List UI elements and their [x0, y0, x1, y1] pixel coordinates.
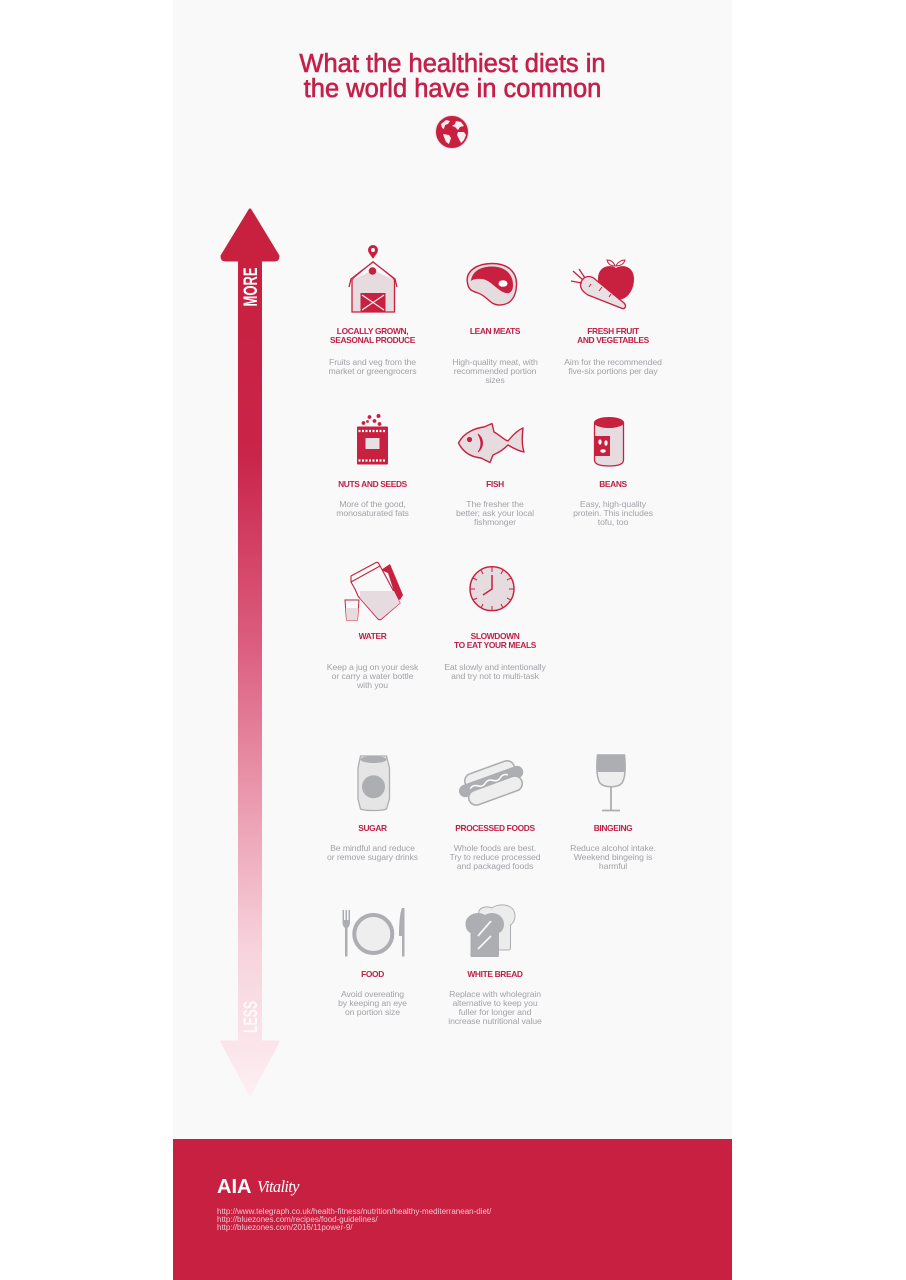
- title: [299, 50, 606, 103]
- heading: TO EAT YOUR MEALS: [454, 640, 536, 650]
- item: white bread: [430, 891, 560, 1026]
- icon: barn: [348, 245, 398, 313]
- shaft: [238, 255, 262, 1045]
- heading: FOOD: [361, 969, 384, 979]
- heading: FRESH FRUIT: [587, 326, 639, 336]
- description: Avoid overeating: [341, 989, 404, 999]
- description: Replace with wholegrain: [449, 989, 541, 999]
- description: alternative to keep you: [452, 998, 538, 1008]
- icon: bean can: [594, 417, 624, 467]
- arrow: more to less scale: [220, 208, 280, 1096]
- icon: soda can: [357, 755, 390, 812]
- logo: AIA Vitality: [217, 1176, 301, 1202]
- description: [298, 990, 448, 1017]
- description: [328, 357, 417, 376]
- description: with you: [357, 680, 388, 690]
- description: and packaged foods: [457, 861, 533, 871]
- heading: AND VEGETABLES: [577, 335, 649, 345]
- description: Eat slowly and intentionally: [444, 662, 546, 672]
- icon: wine glass: [596, 754, 626, 812]
- title: What the healthiest diets in: [299, 50, 606, 78]
- heading: WATER: [359, 631, 386, 641]
- description: Reduce alcohol intake.: [570, 843, 656, 853]
- panel: background: [173, 0, 732, 1139]
- logo: AIA Vitality: AIA: [217, 1176, 251, 1198]
- heading: FISH: [486, 479, 504, 489]
- description: market or greengrocers: [328, 366, 417, 376]
- description: [564, 357, 662, 376]
- description: [420, 990, 570, 1026]
- arrow head: up: [222, 210, 278, 260]
- heading: WHITE BREAD: [467, 969, 523, 979]
- description: fuller for longer and: [459, 1007, 531, 1017]
- description: monosaturated fats: [336, 508, 409, 518]
- item: lean meats: [452, 262, 538, 385]
- heading: [330, 326, 415, 345]
- description: [336, 499, 409, 518]
- item: bingeing: [570, 754, 656, 871]
- description: Aim for the recommended: [564, 357, 662, 367]
- description: recommended portion: [454, 366, 536, 376]
- description: fishmonger: [474, 517, 516, 527]
- description: [456, 499, 534, 527]
- heading: [577, 326, 649, 345]
- source links: [217, 1208, 491, 1232]
- icon: clock: [469, 566, 515, 612]
- icon: hot dog: [459, 760, 524, 806]
- label: less: LESS: [241, 1001, 262, 1033]
- description: Whole foods are best.: [454, 843, 536, 853]
- description: protein. This includes: [573, 508, 653, 518]
- description: [327, 843, 418, 862]
- description: and try not to multi-task: [451, 671, 539, 681]
- description: [327, 662, 418, 690]
- description: Be mindful and reduce: [330, 843, 415, 853]
- source links: http://bluezones.com/2016/11power-9/: [217, 1223, 352, 1232]
- heading: SLOWDOWN: [471, 631, 519, 641]
- heading: BINGEING: [594, 823, 632, 833]
- description: or remove sugary drinks: [327, 852, 418, 862]
- description: High-quality meat, with: [452, 357, 538, 367]
- logo: AIA Vitality: Vitality: [257, 1177, 299, 1196]
- icon: globe: [435, 115, 469, 149]
- description: Keep a jug on your desk: [327, 662, 418, 672]
- label: more: MORE: [241, 268, 262, 306]
- footer band: [173, 1139, 732, 1280]
- heading: PROCESSED FOODS: [455, 823, 535, 833]
- heading: LEAN MEATS: [470, 326, 520, 336]
- description: by keeping an eye: [338, 998, 407, 1008]
- title: the world have in common: [304, 75, 601, 103]
- description: Weekend bingeing is: [574, 852, 652, 862]
- heading: LOCALLY GROWN,: [337, 326, 408, 336]
- item: water: [327, 562, 418, 690]
- icon: jug and glass: [344, 562, 403, 620]
- source links: http://bluezones.com/recipes/food-guidelines/: [217, 1215, 378, 1224]
- description: on portion size: [345, 1007, 400, 1017]
- description: better; ask your local: [456, 508, 534, 518]
- description: Easy, high-quality: [580, 499, 646, 509]
- icon: steak: [466, 262, 518, 306]
- item: nuts and seeds: [336, 414, 409, 518]
- icon: fish: [458, 422, 525, 464]
- description: or carry a water bottle: [332, 671, 413, 681]
- heading: [454, 631, 536, 650]
- description: harmful: [599, 861, 627, 871]
- source links: http://www.telegraph.co.uk/health-fitness/nutrition/healthy-mediterranean-diet/: [217, 1207, 491, 1216]
- item: beans: [573, 417, 653, 527]
- arrow head: down: [222, 1042, 278, 1094]
- heading: NUTS AND SEEDS: [338, 479, 407, 489]
- item: fish: [456, 422, 534, 527]
- description: [573, 499, 653, 527]
- item: sugar: [327, 755, 418, 862]
- description: Try to reduce processed: [449, 852, 541, 862]
- description: The fresher the: [466, 499, 524, 509]
- icon: nut packet: [357, 414, 388, 464]
- description: sizes: [485, 375, 505, 385]
- icon: plate and cutlery: [341, 906, 407, 958]
- description: five-six portions per day: [568, 366, 658, 376]
- item: slow down: [444, 566, 546, 681]
- description: More of the good,: [339, 499, 406, 509]
- description: [444, 662, 546, 681]
- icon: bread slices: [463, 903, 517, 959]
- heading: SUGAR: [358, 823, 387, 833]
- description: Fruits and veg from the: [329, 357, 416, 367]
- item: processed foods: [449, 760, 541, 871]
- description: tofu, too: [598, 517, 628, 527]
- description: [449, 843, 541, 871]
- item: fruit and vegetables: [564, 260, 662, 376]
- description: increase nutritional value: [448, 1016, 542, 1026]
- description: [452, 357, 538, 385]
- icon: apple and carrot: [570, 260, 634, 310]
- heading: SEASONAL PRODUCE: [330, 335, 415, 345]
- item: locally grown: [328, 245, 417, 376]
- item: food: [338, 908, 407, 1017]
- heading: BEANS: [599, 479, 627, 489]
- description: [570, 843, 656, 871]
